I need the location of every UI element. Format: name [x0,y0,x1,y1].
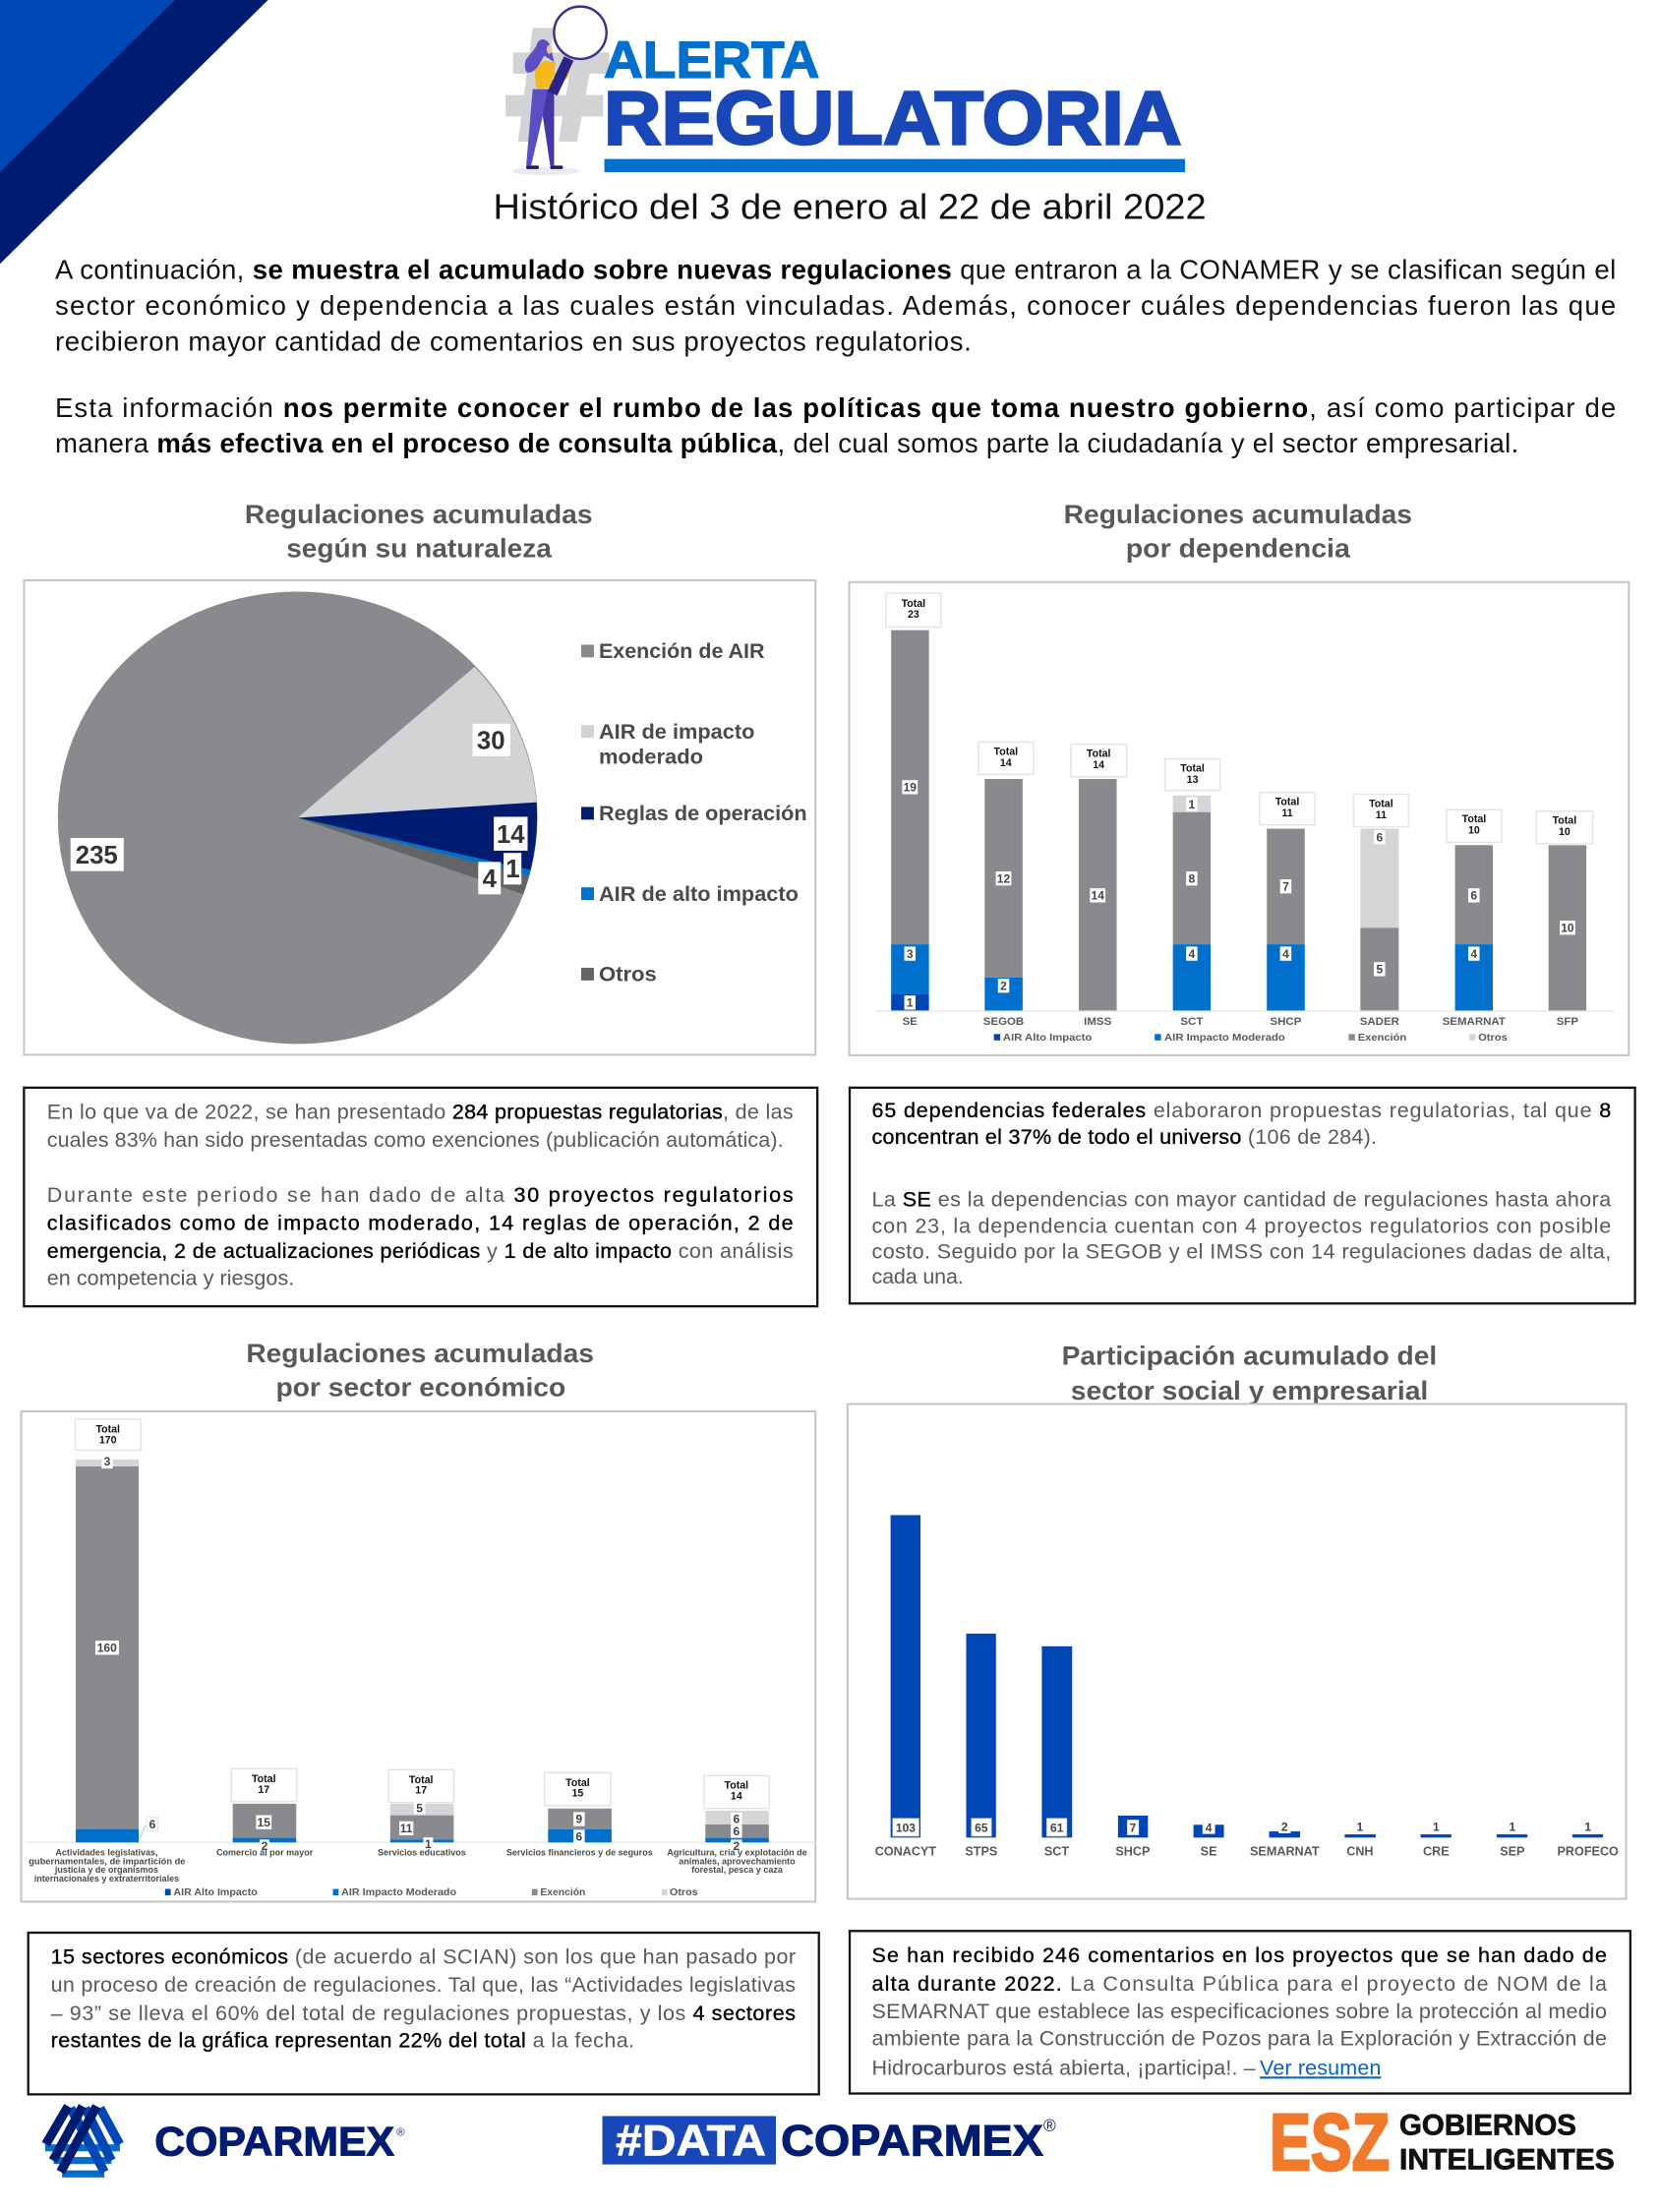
text box: propuestas regulatorias: En lo que va de 2022, se han presentado 284 propuestas regulatorias, de las [47,1100,794,1123]
text box: comentarios: ambiente para la Construcción de Pozos para la Exploración y Extracción de [872,2027,1607,2051]
text box: comentarios: Ver resumen [1260,2056,1381,2079]
text box: comentarios: Se han recibido 246 comentarios en los proyectos que se han dado de [872,1943,1607,1967]
axis labels [29,1847,807,1883]
icon: hash symbol [505,28,610,142]
value label 30: 30 [477,728,505,755]
logo: #DATA COPARMEX: COPARMEX [781,2118,1043,2166]
axis labels: animales, aprovechamiento [679,1856,796,1866]
legend: Exención [540,1887,585,1898]
axis labels: Servicios educativos [378,1847,466,1857]
axis labels: CNH [1346,1845,1374,1859]
pie chart [58,592,538,1044]
bar: Servicios educativos [388,1769,453,1851]
bar: SEP: 1 [1509,1821,1515,1834]
bar: SEMARNAT [1269,1819,1300,1837]
logo underline bar [605,159,1185,172]
bar: SEGOB: Total [994,746,1018,757]
axis labels: SEMARNAT [1250,1845,1320,1859]
intro paragraph 2: Esta información nos permite conocer el rumbo de las políticas que toma nuestro gobierno, así como participar de [55,392,1616,423]
legend: AIR Alto Impacto [173,1887,258,1898]
bar: Servicios financieros: 15 [572,1788,583,1800]
bar: Actividades legislativas: 6 [149,1818,156,1831]
wordmark REGULATORIA: REGULATORIA [604,77,1181,161]
axis labels: SHCP [1270,1016,1302,1028]
axis labels: SE [903,1016,918,1028]
text box: comentarios [850,1931,1630,2094]
axis labels: CRE [1423,1845,1450,1859]
bar: SCT [1165,759,1220,1010]
bar: Comercio al por mayor [231,1768,297,1853]
legend: Otros [670,1887,698,1898]
text box: comentarios: Hidrocarburos está abierta, ¡participa!. – [872,2056,1256,2079]
axis labels: Comercio al por mayor [216,1847,314,1857]
bar: SHCP: 7 [1130,1821,1137,1834]
heading: participación: sector social y empresarial [1071,1375,1428,1405]
bar: Comercio al por mayor: 2 [262,1839,268,1853]
bar: SCT: 8 [1189,871,1196,885]
bar: Servicios financieros [545,1772,612,1844]
axis labels: SHCP [1115,1845,1150,1859]
bar: Servicios financieros: 6 [575,1830,582,1844]
heading: participación: Participación acumulado del [1062,1341,1437,1371]
legend: moderado [599,747,703,769]
axis labels: SEGOB [983,1016,1024,1028]
bar: SEGOB: 12 [997,871,1011,885]
heading: dependencia: por dependencia [1126,533,1351,564]
axis labels: SEP [1500,1845,1524,1859]
axis labels: Agricultura, cría y explotación de [667,1847,807,1857]
axis labels: SFP [1557,1016,1578,1028]
logo: ESZ Gobiernos Inteligentes: INTELIGENTES [1399,2144,1615,2177]
text box: propuestas regulatorias: clasificados como de impacto moderado, 14 reglas de operación, 2 de [47,1212,794,1235]
value label 14 [494,816,528,851]
bar: SHCP [1260,793,1315,1010]
intro paragraph 1: A continuación, se muestra el acumulado sobre nuevas regulaciones que entraron a la CONAMER y se clasifican según el [55,254,1616,284]
subtitle: Histórico del 3 de enero al 22 de abril 2022 [494,187,1207,227]
bar: SFP: Total [1553,815,1576,827]
bar: Servicios financieros: 9 [575,1813,582,1826]
bar: SADER: 6 [1376,830,1383,844]
axis labels: gubernamentales, de impartición de [29,1856,185,1866]
wordmark ALERTA: ALERTA [604,31,819,90]
bar: SHCP: Total [1275,797,1299,808]
text box: dependencias federales: concentran el 37% de todo el universo (106 de 284). [872,1125,1377,1149]
bar: SHCP: 11 [1281,807,1293,819]
text box: propuestas regulatorias [24,1088,817,1306]
axis labels: SEMARNAT [1443,1016,1506,1028]
legend: AIR de alto impacto [599,883,799,906]
bar: SEMARNAT: 4 [1470,947,1477,961]
text box: dependencias federales: La SE es la dependencias con mayor cantidad de regulaciones hasta ahora [872,1187,1611,1211]
bar: SCT: 1 [1189,798,1196,811]
bar: SEMARNAT: Total [1462,813,1486,825]
bar: SFP: 10 [1561,922,1574,935]
heading: naturaleza: Regulaciones acumuladas [245,499,592,529]
panel: dependencia stacked bars [850,582,1629,1055]
heading: naturaleza [245,499,592,564]
bar: SE [1194,1819,1224,1837]
bar: Servicios educativos: 11 [400,1822,413,1835]
bar: SADER: 11 [1376,809,1387,821]
icon: COPARMEX triangles [45,2106,120,2178]
bar: SHCP [1118,1816,1148,1837]
bar: SCT [1041,1646,1072,1837]
text box: propuestas regulatorias: Durante este periodo se han dado de alta 30 proyectos regulatorios [47,1183,794,1207]
bar: SE: Total [902,598,925,610]
bar: SEGOB [978,742,1034,1010]
bar: Actividades legislativas: 3 [104,1455,111,1468]
bar: IMSS: 14 [1092,889,1104,903]
bar: SADER [1353,795,1408,1010]
icon: woman with magnifier [511,7,607,175]
logo: ESZ Gobiernos Inteligentes [1270,2098,1615,2187]
legend: AIR Impacto Moderado [341,1887,456,1898]
panel: pie chart [24,580,815,1054]
intro paragraph 1 [55,254,1616,356]
text box: dependencias federales: cada una. [872,1265,964,1288]
bar: SE: 3 [907,947,914,961]
corner decoration [0,0,268,264]
bar: SEP [1497,1819,1527,1837]
heading: sector económico [246,1338,594,1402]
legend [994,1033,1508,1044]
axis labels: Servicios financieros y de seguros [506,1847,653,1857]
logo: #DATA COPARMEX [603,2116,1056,2166]
bar: CONACYT: 103 [896,1821,916,1834]
bar: Agricultura: 14 [731,1790,742,1802]
axis labels: SADER [1360,1016,1400,1028]
bar: SE: 19 [904,781,917,795]
legend: AIR Alto Impacto [1003,1033,1092,1044]
axis labels: internacionales y extraterritoriales [34,1874,179,1883]
axis labels: SE [1201,1845,1217,1859]
logo: ESZ Gobiernos Inteligentes: GOBIERNOS [1399,2110,1576,2142]
bar: Servicios financieros: Total [565,1777,590,1789]
bar: CNH: 1 [1357,1821,1364,1834]
bar: Agricultura: 6 [733,1813,740,1826]
legend: Otros [1478,1033,1508,1044]
bar: SCT: 4 [1189,947,1196,961]
text box: comentarios: alta durante 2022. La Consulta Pública para el proyecto de NOM de la [872,1972,1607,1996]
axis labels: SCT [1044,1845,1069,1859]
bar: CRE [1421,1819,1452,1837]
bar: Agricultura: Total [725,1780,748,1792]
bar: Servicios educativos: 5 [416,1801,423,1815]
heading: sector económico: por sector económico [275,1371,565,1402]
axis labels [903,1016,1578,1028]
bar: IMSS: 14 [1093,759,1104,771]
value label 235 [71,838,124,871]
intro paragraph 1: sector económico y dependencia a las cuales están vinculadas. Además, conocer cuáles dependencias fueron las que [55,290,1616,321]
bar: CRE: 1 [1433,1821,1440,1834]
bar: CONACYT [891,1515,920,1837]
bar: PROFECO: 1 [1584,1821,1591,1834]
bar: CNH [1344,1819,1376,1837]
bar: Comercio al por mayor: 15 [258,1816,270,1829]
bar: SEGOB: 14 [1000,757,1012,769]
logo: #DATA COPARMEX: #DATA [616,2118,766,2166]
bar: SADER: Total [1369,798,1393,809]
logo: COPARMEX [45,2106,405,2178]
text box: dependencias federales: con 23, la dependencia cuentan con 4 proyectos regulatorios con posible [872,1215,1611,1238]
bar: Actividades legislativas: Total [95,1424,120,1436]
value label 235: 235 [76,842,118,869]
bar: SE: 4 [1206,1821,1213,1834]
text box: sectores económicos: un proceso de creación de regulaciones. Tal que, las “Actividades legislativas [51,1973,796,1997]
axis labels: justicia y de organismos [54,1865,158,1875]
bar: SFP [1536,811,1593,1010]
panel: participación bars [848,1404,1627,1899]
panel: sector económico stacked bars [22,1411,815,1901]
bar: IMSS [1071,745,1127,1010]
bar: PROFECO [1572,1819,1603,1837]
intro paragraph 2 [55,392,1616,458]
bar: Comercio al por mayor: 17 [258,1784,269,1796]
text box: comentarios: SEMARNAT que establece las especificaciones sobre la protección al medio [872,2000,1607,2023]
bar: Servicios educativos: 1 [425,1837,432,1851]
bar: SE [886,593,941,1010]
bar: SHCP: 4 [1282,947,1289,961]
text box: propuestas regulatorias: cuales 83% han sido presentadas como exenciones (publicación automática). [47,1128,784,1152]
bar: IMSS: Total [1087,748,1111,760]
legend: AIR Impacto Moderado [1164,1033,1285,1044]
wordmark COPARMEX: COPARMEX [154,2119,394,2165]
heading: participación [1062,1341,1437,1405]
axis labels: PROFECO [1558,1845,1619,1859]
legend: Exención [1358,1033,1406,1044]
value label 4 [478,862,501,894]
bar: SFP: 10 [1559,826,1570,838]
bar: SEMARNAT: 6 [1470,889,1477,903]
legend: AIR de impacto [599,721,754,744]
text box: sectores económicos: restantes de la gráfica representan 22% del total a la fecha. [51,2029,634,2053]
bar: SEMARNAT: 2 [1281,1821,1288,1834]
text box: dependencias federales: costo. Seguido por la SEGOB y el IMSS con 14 regulaciones dadas de alta, [872,1239,1611,1263]
bar: Actividades legislativas [75,1419,158,1842]
text box: dependencias federales [850,1088,1635,1303]
legend: Reglas de operación [599,803,807,825]
value label 1 [504,853,521,884]
bar: SCT: 13 [1187,774,1199,786]
axis labels: STPS [965,1845,997,1859]
heading: sector económico: Regulaciones acumuladas [246,1338,594,1368]
bar: Comercio al por mayor: Total [252,1773,276,1785]
bar: SEGOB: 2 [1000,979,1007,992]
legend [165,1887,698,1898]
text box: propuestas regulatorias: en competencia y riesgos. [47,1267,294,1290]
heading: dependencia: Regulaciones acumuladas [1064,499,1412,529]
axis labels [875,1845,1619,1859]
text box: sectores económicos [29,1933,819,2094]
value label 30 [473,724,510,756]
heading: dependencia [1064,499,1412,564]
value label 4: 4 [483,866,498,893]
text box: sectores económicos: – 93” se lleva el 60% del total de regulaciones propuestas, y los 4 sectores [51,2002,796,2025]
bar: SEMARNAT [1447,809,1502,1010]
bar: SCT: Total [1180,763,1205,775]
bar: SE: 23 [908,609,919,621]
value label 14: 14 [497,821,525,849]
bar: SEMARNAT: 10 [1468,825,1480,837]
axis labels: SCT [1180,1016,1203,1028]
bar: Servicios educativos: 17 [415,1785,427,1797]
axis labels: Actividades legislativas, [55,1847,158,1857]
bar: Actividades legislativas: 170 [99,1434,117,1446]
logo: COPARMEX: ® [396,2127,405,2139]
bar: SHCP: 7 [1282,879,1289,893]
legend: Exención de AIR [599,640,765,663]
heading: naturaleza: según su naturaleza [286,533,553,564]
text box: propuestas regulatorias: emergencia, 2 de actualizaciones periódicas y 1 de alto impacto con análisis [47,1239,794,1263]
intro paragraph 1: recibieron mayor cantidad de comentarios en sus proyectos regulatorios. [55,326,972,356]
bar: SE: 1 [907,996,914,1010]
bar: Actividades legislativas: 160 [97,1642,117,1655]
logo: Alerta Regulatoria [505,7,1185,175]
bar: STPS [967,1634,996,1837]
logo: ESZ Gobiernos Inteligentes: ESZ [1270,2098,1390,2187]
bar: Servicios educativos: Total [409,1774,434,1786]
bar: Agricultura: 6 [733,1824,740,1838]
bar: STPS: 65 [975,1821,988,1834]
bar: Agricultura: 2 [733,1839,740,1853]
intro paragraph 2: manera más efectiva en el proceso de consulta pública, del cual somos parte la ciudadanía y el sector empresarial. [55,428,1518,458]
legend: Otros [599,964,657,986]
axis labels: forestal, pesca y caza [691,1865,784,1875]
bar: Agricultura [704,1775,769,1853]
bar: SADER: 5 [1376,963,1383,977]
value label 1: 1 [505,856,520,883]
axis labels: IMSS [1084,1016,1112,1028]
axis labels: CONACYT [875,1845,936,1859]
text box: dependencias federales: 65 dependencias federales elaboraron propuestas regulatorias, tal que 8 [872,1099,1611,1122]
logo: #DATA COPARMEX: ® [1043,2116,1056,2135]
legend [581,640,807,986]
text box: sectores económicos: 15 sectores económicos (de acuerdo al SCIAN) son los que han pasado por [51,1945,796,1969]
bar: SCT: 61 [1050,1821,1064,1834]
